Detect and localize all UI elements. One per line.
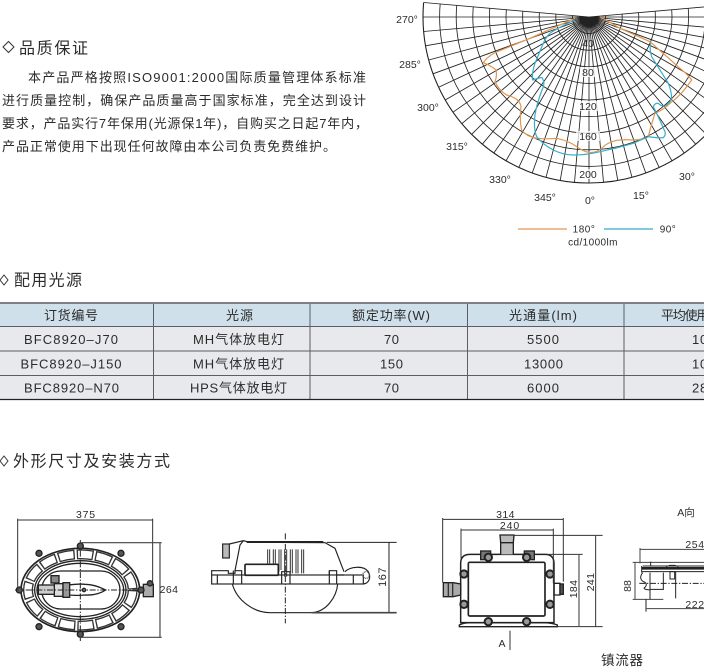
heading: dimensions and installation: 外形尺寸及安装方式: [13, 452, 170, 470]
chart: polar light distribution: [396, 0, 708, 248]
table row: BFC8920-J150: [22, 357, 704, 370]
curve: 90 degree plane: [532, 20, 672, 155]
view A labels: 254: [685, 539, 705, 551]
legend: 180°: [573, 224, 595, 236]
drawing: lamp top view: [15, 509, 178, 641]
radial scale labels: 160: [579, 131, 597, 143]
angle labels: 330°: [489, 174, 511, 186]
table row: BFC8920-N70: BFC8920–N70: [24, 380, 119, 396]
table row: BFC8920-J70: 70: [384, 332, 399, 347]
radial scale labels: 40: [582, 38, 594, 50]
angle labels: 0°: [585, 195, 595, 207]
heading: quality assurance: 品质保证: [19, 40, 88, 58]
text block: quality assurance paragraph: [2, 70, 368, 154]
angle labels: 345°: [534, 192, 556, 204]
ballast dimension labels: [496, 509, 597, 650]
radial scale labels: [576, 38, 600, 181]
radial scale labels: 120: [579, 101, 597, 113]
angle labels: 300°: [417, 102, 439, 114]
table row: BFC8920-J70: BFC8920–J70: [24, 332, 118, 347]
view A labels: [622, 506, 705, 611]
drawing: lamp top view: 375: [76, 509, 96, 521]
text block: quality assurance paragraph: 进行质量控制，确保产品质量高于国家标准，完全达到设计: [2, 93, 366, 108]
curve: 180 degree plane: [483, 17, 692, 153]
table row: BFC8920-J70: 5500: [527, 332, 559, 347]
angle labels: 30°: [679, 171, 695, 183]
table row: BFC8920-N70: 70: [384, 380, 399, 396]
table header row: 光源: [226, 308, 253, 323]
table row: BFC8920-N70: 6000: [527, 380, 559, 396]
ballast dimension labels: 240: [500, 520, 520, 532]
drawing: lamp side view: [212, 533, 397, 623]
table row: BFC8920-J70: [25, 332, 704, 346]
drawing: lamp side view: 167: [377, 567, 389, 587]
text block: quality assurance paragraph: 要求，产品实行7年保用(光源保1年)，自购买之日起7年内，: [2, 116, 368, 131]
ballast dimension labels: A: [498, 638, 506, 650]
ballast dimension labels: 241: [585, 573, 597, 591]
ballast dimension labels: 184: [568, 580, 580, 598]
table row: BFC8920-N70: [25, 381, 704, 394]
heading: light sources: 配用光源: [14, 272, 82, 290]
legend: 90°: [660, 224, 676, 236]
table row: BFC8920-J150: 13000: [524, 356, 563, 372]
view A labels: 88: [622, 580, 634, 592]
ballast dimension labels: 314: [496, 509, 515, 521]
table header row: 额定功率(W): [352, 308, 430, 323]
drawing: lamp top view: 264: [160, 584, 178, 596]
angle labels: [396, 14, 695, 207]
radial scale labels: 200: [579, 169, 597, 181]
text block: quality assurance paragraph: 本产品严格按照ISO9001:2000国际质量管理体系标准: [28, 70, 366, 85]
view A labels: 222: [685, 599, 705, 611]
table header row: 光通量(lm): [509, 308, 577, 323]
table row: BFC8920-J150: MH气体放电灯: [193, 356, 284, 372]
drawing: ballast view A: [622, 506, 705, 612]
view A labels: A向: [677, 506, 695, 519]
table: light sources: [0, 303, 708, 400]
legend: cd/1000lm: [568, 238, 618, 248]
angle labels: 285°: [399, 59, 421, 71]
angle labels: 315°: [446, 141, 468, 153]
text block: quality assurance paragraph: 产品正常使用下出现任何故障由本公司负责免费维护。: [2, 139, 336, 154]
caption: ballast: 镇流器: [601, 653, 644, 668]
table background: [0, 303, 704, 400]
drawing: ballast: [443, 509, 603, 650]
table row: BFC8920-J70: MH气体放电灯: [193, 332, 284, 347]
angle labels: 15°: [633, 190, 649, 202]
radial scale labels: 80: [582, 67, 594, 79]
dimension: 375 and 264: [18, 519, 162, 637]
angle labels: 270°: [396, 14, 418, 26]
legend: [518, 225, 676, 246]
table row: BFC8920-J150: 150: [380, 356, 403, 372]
table header row: [44, 308, 708, 323]
table row: BFC8920-N70: HPS气体放电灯: [190, 380, 287, 396]
polar grid: [423, 0, 708, 183]
table row: BFC8920-J150: BFC8920–J150: [20, 356, 122, 372]
table header row: 订货编号: [44, 308, 98, 323]
